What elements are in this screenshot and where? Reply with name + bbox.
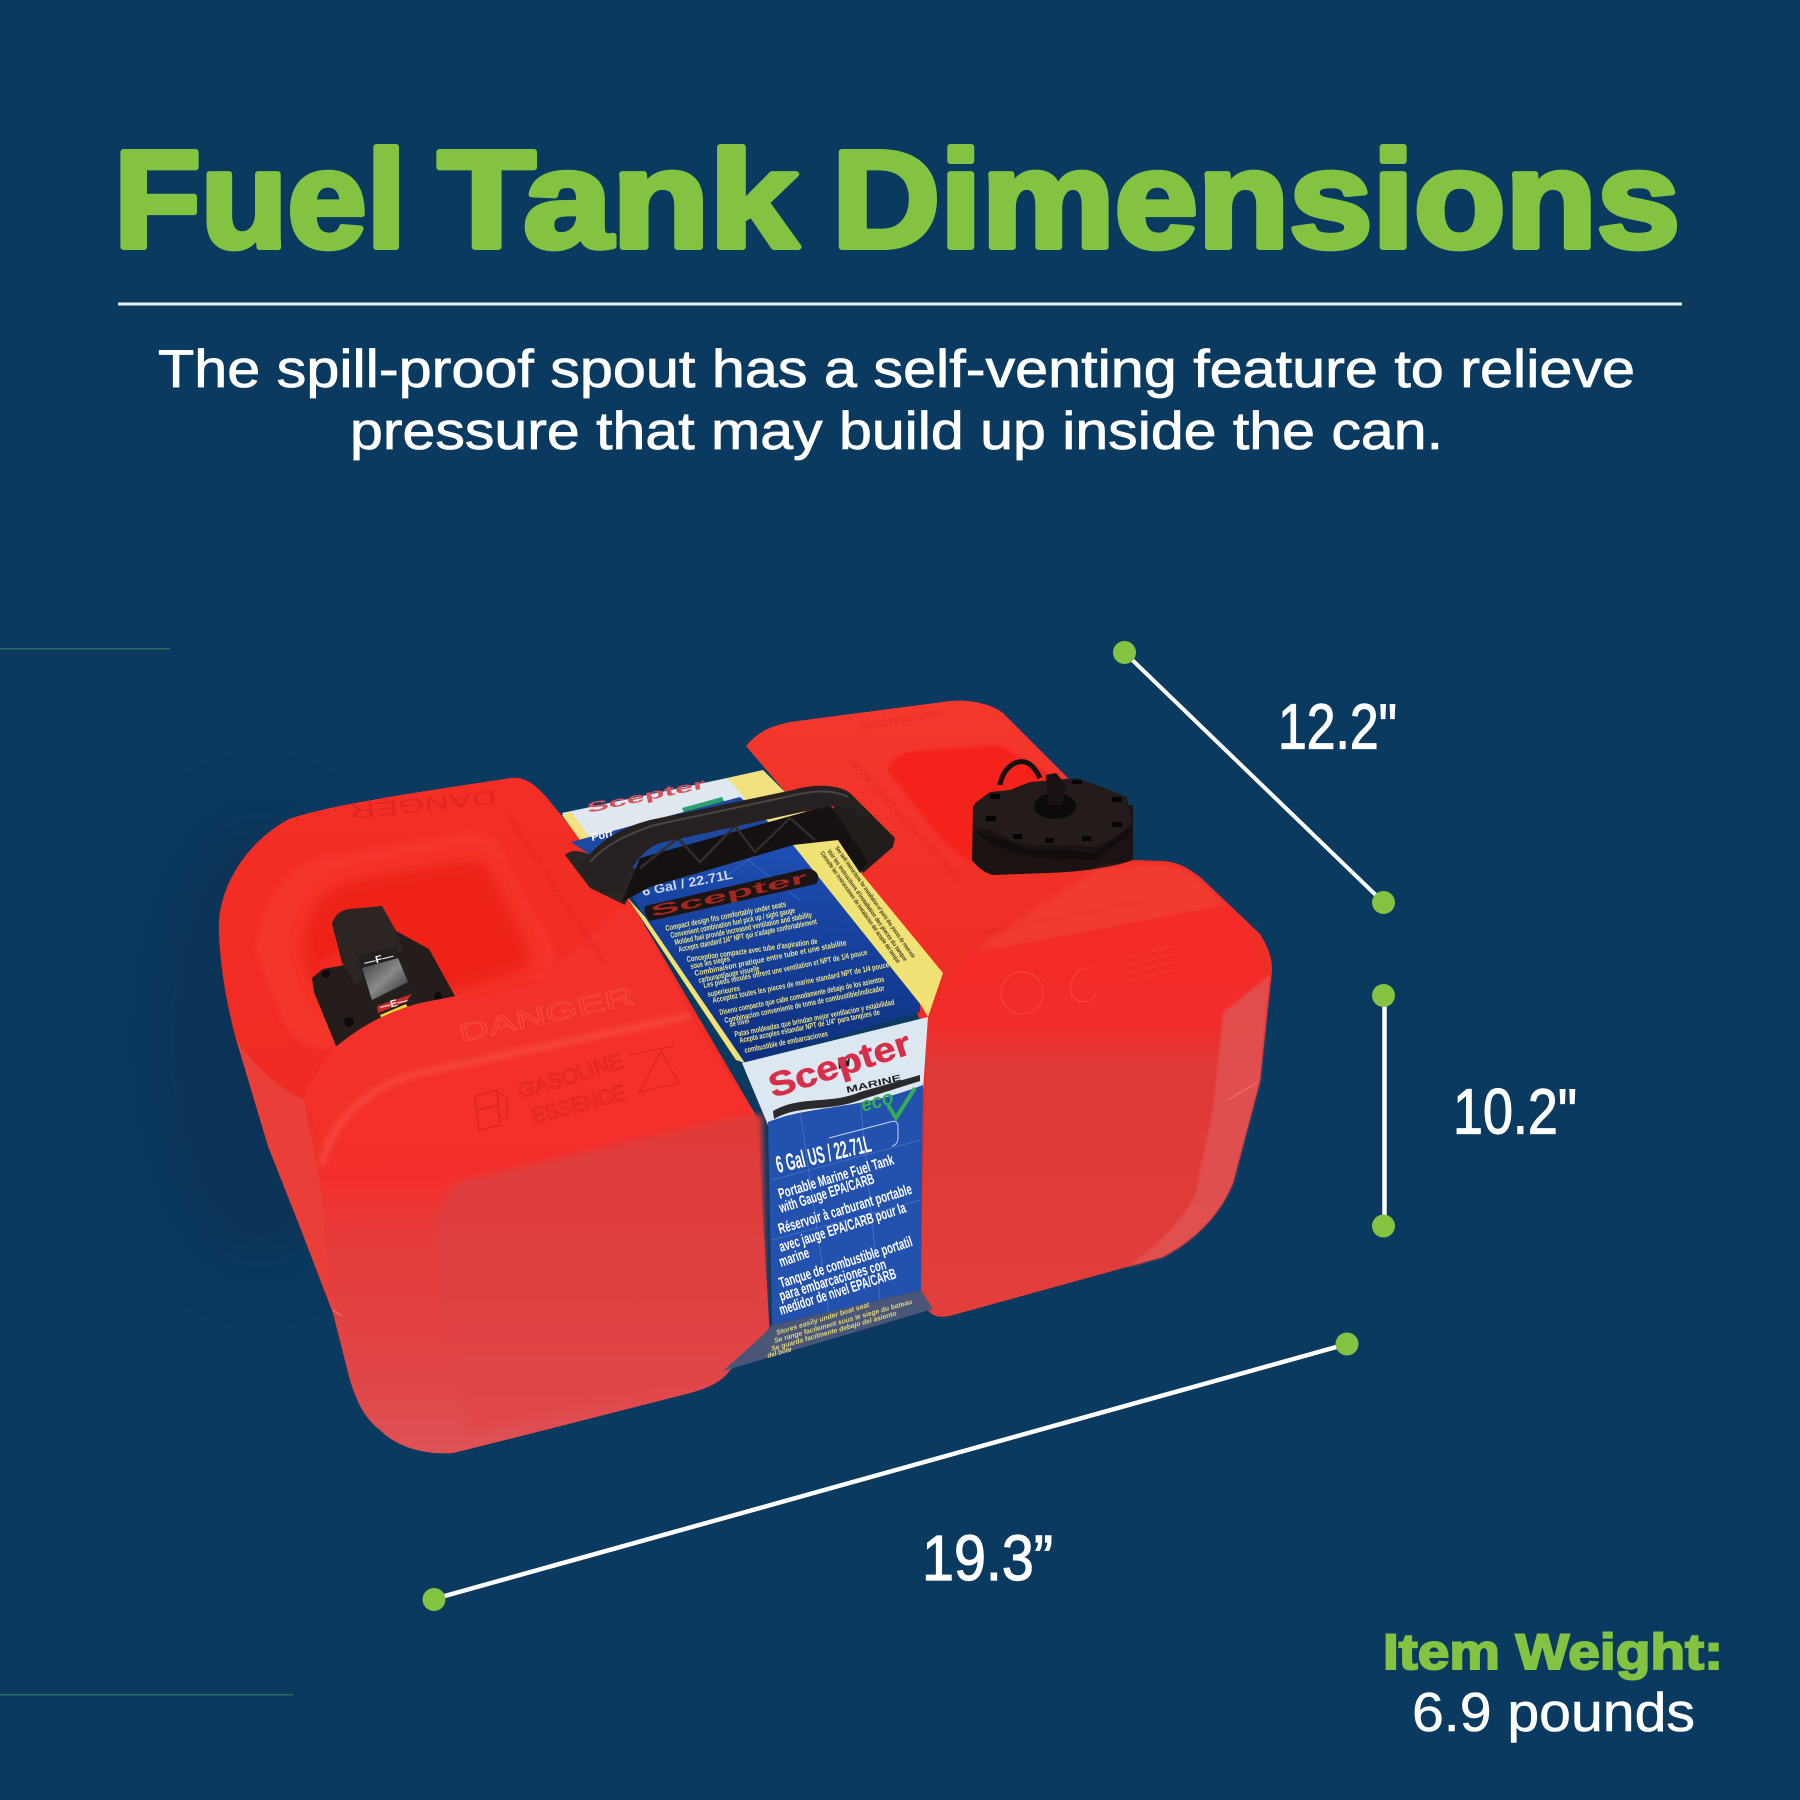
handle left base xyxy=(565,851,640,905)
top capacity text: 6 Gal / 22.71L xyxy=(641,867,734,899)
white upper label xyxy=(562,778,745,848)
bottom strip text xyxy=(767,1299,914,1360)
product description xyxy=(776,1151,915,1319)
re-cover of gauge base by lip xyxy=(336,996,470,1060)
dimension: height 10.2 inches: 10.2" xyxy=(1453,1076,1577,1148)
product description: with Gauge EPA/CARB xyxy=(776,1170,877,1217)
right deck embossing xyxy=(844,707,1167,937)
upper logo: Scepter xyxy=(585,775,708,816)
right block body xyxy=(746,701,1272,1317)
yellow left strip xyxy=(627,897,745,1063)
left face top highlight xyxy=(322,1016,690,1165)
carb text: A/CARB xyxy=(638,867,673,884)
Scepter logo: Scepter xyxy=(764,1024,915,1106)
yellow feature text: Patas moldeadas que brindan mejor ventilacion y estabilidad xyxy=(734,998,895,1039)
product description: Réservoir à carburant portable xyxy=(776,1181,914,1238)
dark logo bar xyxy=(645,869,818,921)
pump icon xyxy=(475,1090,507,1130)
title: Tank xyxy=(438,123,798,277)
left inner panel xyxy=(437,1115,766,1430)
left side surface xyxy=(236,1039,333,1313)
fuel tank illustration xyxy=(219,701,1272,1453)
left recess inner xyxy=(300,860,532,1012)
product description: medidor de nivel EPA/CARB xyxy=(777,1265,899,1319)
bottom strip text: Se guarda facilmente debajo del asiento xyxy=(771,1310,898,1353)
right front face xyxy=(920,905,1268,1317)
yellow feature text: Conception compacte avec tube d'aspiration de xyxy=(686,937,818,964)
capacity outline xyxy=(829,1121,898,1146)
subtitle text: The spill-proof spout has a self-venting feature to relieve xyxy=(158,340,1635,399)
cap spout xyxy=(1034,793,1076,819)
gauge screws xyxy=(322,970,442,1027)
grey bottom strip xyxy=(723,1290,933,1371)
title: Fuel xyxy=(114,123,406,277)
item weight callout xyxy=(1383,1624,1723,1743)
tank shadow xyxy=(150,810,370,1270)
dimension: depth 12.2 inches xyxy=(1113,641,1397,914)
gauge xyxy=(312,906,455,1046)
crown xyxy=(838,1056,850,1069)
bottom strip text: Stores easily under boat seat xyxy=(776,1302,871,1337)
bottom strip text: Se range facilement sous le siege du bateau xyxy=(774,1299,914,1345)
product description: avec jauge EPA/CARB pour la xyxy=(777,1200,908,1256)
top label xyxy=(627,840,943,1063)
yellow feature text: Combinaison pratique entre tube et une stabilite xyxy=(694,938,848,978)
side embossing: GASOLINE ESSENCE GASOLINA PELIGRO DANGER DANGER xyxy=(502,810,609,968)
left recess outer xyxy=(255,832,555,1049)
embossed text on left block xyxy=(349,785,679,1130)
gasoline: GASOLINE xyxy=(515,1048,626,1104)
cap notches xyxy=(986,780,1122,843)
product description: para embarcaciones con xyxy=(777,1256,888,1305)
item weight callout: 6.9 pounds xyxy=(1412,1681,1695,1743)
carry handle xyxy=(565,786,895,905)
yellow upper strip xyxy=(727,770,838,848)
upside-down danger: DANGER xyxy=(349,785,498,822)
title: Dimensions xyxy=(832,123,1680,277)
handle right base xyxy=(825,793,895,873)
subtitle text xyxy=(158,340,1635,461)
eco mark: eco xyxy=(858,1087,896,1117)
dark bar logo: Scepter xyxy=(649,870,809,921)
left lip xyxy=(304,900,700,1150)
grid lines xyxy=(700,852,800,900)
yellow feature text: Acepta acoples estandar NPT de 1/4" para tanques de xyxy=(739,1008,881,1045)
product description: Portable Marine Fuel Tank xyxy=(776,1151,896,1203)
gauge: —E— xyxy=(379,995,409,1013)
dimension: height 10.2 inches xyxy=(1372,984,1577,1238)
blue top panel xyxy=(630,845,920,1063)
dimension: depth 12.2 inches: 12.2" xyxy=(1278,690,1397,762)
title xyxy=(114,123,1680,277)
left block body xyxy=(219,778,770,1453)
yellow feature text: Combinacion conveniente de toma de combustible/indicador xyxy=(724,984,885,1025)
item weight callout: Item Weight: xyxy=(1383,1624,1723,1680)
cap top gear xyxy=(975,778,1132,847)
product description: marine xyxy=(777,1245,812,1271)
yellow feature text: Accepts standard 1/4" NPT qui s'adapte confortablement xyxy=(678,917,818,954)
yellow feature text: Molded fuel provide increased ventilation and stability xyxy=(674,910,813,947)
dimension: length 19.3 inches xyxy=(422,1332,1358,1611)
yellow feature text: Acceptez toutes les pieces de marine standard NPT de 1/4 pouce xyxy=(712,960,890,1005)
yellow upper edge xyxy=(562,812,600,854)
handle lattice xyxy=(622,805,868,902)
handle grip xyxy=(578,786,872,892)
left front face xyxy=(320,1014,770,1453)
yellow strip small print: Voir les instructions d'installation des pieces du tanque xyxy=(825,849,908,963)
right face emboss marks xyxy=(1001,947,1170,1014)
right deck embossing: WARNING FLAMMABLE KEEP AWAY FROM CHILDREN AVERTISSEMENT xyxy=(982,894,1167,937)
yellow feature text: sous les sieges xyxy=(690,954,731,971)
subtitle text: pressure that may build up inside the can. xyxy=(350,402,1443,461)
left face seam xyxy=(333,1310,342,1316)
Marine sublabel: MARINE xyxy=(845,1073,902,1095)
white label header xyxy=(742,1017,928,1125)
product description: Tanque de combustible portatil xyxy=(777,1233,915,1292)
yellow strip small print: See tank instructions for installation of parts des pieces de reservoir xyxy=(833,846,916,960)
grip sheen xyxy=(590,791,848,862)
bottom strip text: del bote xyxy=(767,1346,793,1360)
lip danger: DANGER xyxy=(456,982,637,1048)
yellow feature text: Compact design fits comfortably under seats xyxy=(665,900,787,933)
front label xyxy=(723,1017,933,1371)
dimension: length 19.3 inches: 19.3” xyxy=(922,1522,1053,1594)
right deck highlight xyxy=(975,866,1255,950)
warning triangle xyxy=(629,1046,679,1092)
upper blue band xyxy=(571,797,800,895)
panel grid xyxy=(772,1100,921,1320)
right pale side xyxy=(1128,975,1270,1267)
yellow feature text: Les pieds moules offrent une ventilation et NPT de 1/4 pouce xyxy=(703,948,868,990)
right deck embossing: GASOLINE ESSENCE GASOLINA PELIGRO DANGER xyxy=(844,753,965,886)
capacity text: 6 Gal US / 22.71L xyxy=(773,1131,874,1179)
yellow feature text: superieures xyxy=(707,983,741,999)
right deck embossing: DANGER GASOLINE ESSENCE xyxy=(859,707,944,732)
cap strap xyxy=(1000,762,1040,785)
right deck recess xyxy=(887,745,1075,863)
yellow feature text: combustible de embarcaciones xyxy=(744,1029,829,1055)
right face seam xyxy=(1228,1082,1258,1100)
gauge hood xyxy=(332,906,403,985)
fuel cap xyxy=(972,762,1133,875)
gauge plate xyxy=(312,931,455,1046)
yellow feature text: carburant/jauge visuelle xyxy=(698,964,761,985)
yellow feature text: Convenient combination fuel pick up / sight gauge xyxy=(670,906,796,940)
essence: ESSENCE xyxy=(529,1080,628,1129)
yellow feature text: Diseno compacto que cabe comodamente debajo de los asientos xyxy=(719,975,885,1017)
upper label behind handle xyxy=(562,770,838,895)
cap body xyxy=(972,805,1133,875)
upper eco mark xyxy=(682,797,725,815)
yellow feature text: de nivel xyxy=(729,1016,750,1029)
gauge: —F— xyxy=(363,951,395,969)
yellow right strip xyxy=(793,840,943,1017)
blue front panel xyxy=(768,1085,923,1325)
yellow feature text xyxy=(665,900,895,1055)
yellow strip small print: Consulte las instrucciones de instalacion del acople del tanque xyxy=(818,851,901,965)
port text: Port xyxy=(590,828,614,844)
gauge window xyxy=(357,946,420,1022)
label wave xyxy=(773,1075,920,1119)
lattice ribs xyxy=(640,815,815,868)
gauge tab xyxy=(318,950,342,980)
eco mark xyxy=(858,1087,915,1118)
